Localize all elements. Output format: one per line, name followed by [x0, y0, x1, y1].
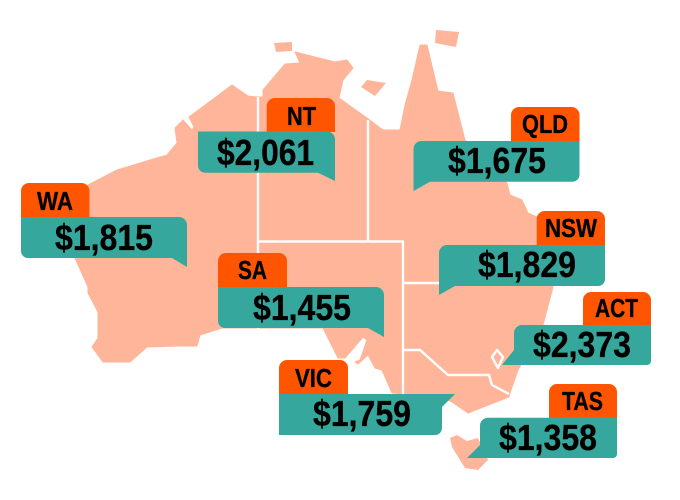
VIC state name: VIC — [295, 363, 332, 393]
NSW value: $1,829 — [478, 244, 576, 285]
TAS state name: TAS — [562, 386, 603, 416]
Tasmania — [450, 435, 488, 470]
NT value: $2,061 — [217, 132, 314, 173]
Tiwi Islands — [274, 42, 292, 52]
NSW state name: NSW — [545, 213, 597, 243]
NT state name: NT — [287, 101, 316, 131]
WA state name: WA — [37, 186, 73, 216]
label: ACT — [502, 292, 651, 365]
SA value: $1,455 — [253, 287, 351, 328]
state borders — [258, 97, 509, 396]
label: VIC — [279, 360, 455, 435]
label: NSW — [439, 211, 605, 295]
Torres Strait island — [435, 30, 459, 47]
label: NT — [198, 98, 335, 181]
VIC value: $1,759 — [313, 393, 411, 434]
ACT state name: ACT — [595, 293, 638, 323]
ACT value: $2,373 — [533, 324, 631, 365]
Groote Eylandt — [361, 80, 386, 96]
label: SA — [218, 253, 384, 337]
label: WA — [21, 183, 187, 267]
QLD state name: QLD — [522, 109, 568, 139]
TAS value: $1,358 — [499, 417, 597, 458]
map of Australia — [40, 30, 553, 470]
SA state name: SA — [238, 255, 267, 285]
WA value: $1,815 — [55, 217, 153, 258]
QLD value: $1,675 — [448, 140, 546, 181]
label: QLD — [414, 107, 580, 191]
mainland — [40, 45, 553, 413]
label: TAS — [467, 384, 617, 458]
